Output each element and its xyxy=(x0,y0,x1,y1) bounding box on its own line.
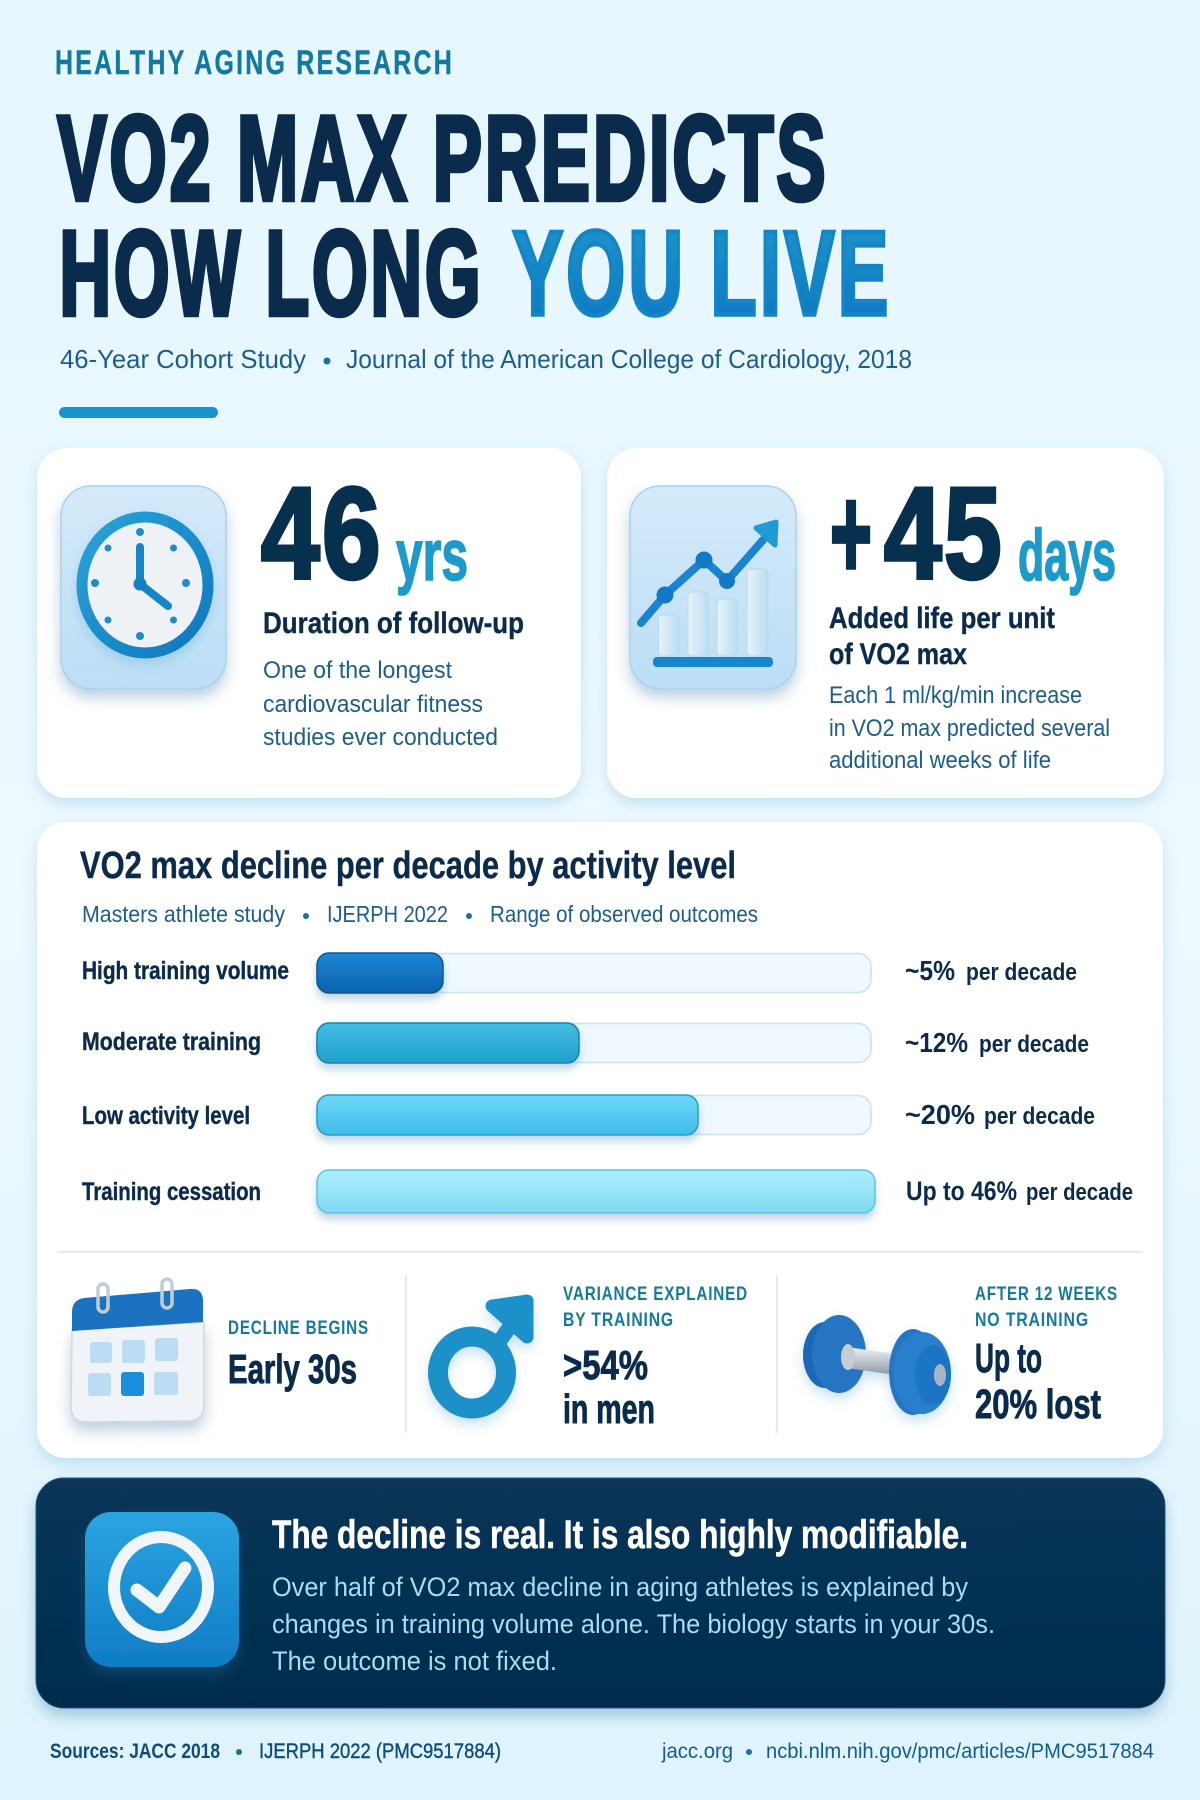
stat heading xyxy=(829,602,1055,671)
bar: low activity level xyxy=(82,1095,1095,1135)
chart subtitle xyxy=(82,901,758,927)
fact: after 12 weeks: AFTER 12 WEEKS xyxy=(975,1284,1118,1305)
bar: moderate training: Moderate training xyxy=(82,1028,261,1056)
fact: after 12 weeks: NO TRAINING xyxy=(975,1310,1089,1331)
bar: training cessation: Training cessation xyxy=(82,1178,261,1206)
bar: high training volume: ~5% xyxy=(905,955,955,986)
chart subtitle: IJERPH 2022 xyxy=(327,901,448,927)
stat description: One of the longest xyxy=(263,657,452,684)
bar: low activity level: per decade xyxy=(984,1103,1095,1130)
stat value: +45 days: days xyxy=(1018,516,1116,596)
icon: check mark xyxy=(85,1512,239,1667)
footer: links: jacc.org xyxy=(661,1740,733,1763)
stat value: 46 yrs: yrs xyxy=(396,516,468,596)
title: YOU LIVE xyxy=(512,206,892,340)
stat description: in VO2 max predicted several xyxy=(829,715,1110,742)
subtitle xyxy=(60,344,912,374)
bar: low activity level: Low activity level xyxy=(82,1102,250,1130)
callout body xyxy=(272,1572,995,1676)
fact: variance explained xyxy=(438,1284,748,1432)
fact: decline begins: Early 30s xyxy=(228,1346,357,1392)
stat value: +45 days: 45 xyxy=(884,460,1004,606)
stat description xyxy=(263,657,498,751)
header eyebrow: HEALTHY AGING RESEARCH xyxy=(55,44,454,82)
panel: +45 days stat xyxy=(607,448,1164,798)
callout: takeaway xyxy=(36,1478,1165,1708)
icon: calendar xyxy=(71,1279,204,1422)
callout body: The outcome is not fixed. xyxy=(272,1646,557,1676)
icon: dumbbell xyxy=(803,1315,951,1415)
bar: moderate training xyxy=(82,1023,1089,1063)
stat description: cardiovascular fitness xyxy=(263,691,483,718)
chart subtitle: Range of observed outcomes xyxy=(490,901,758,927)
fact: after 12 weeks xyxy=(803,1284,1118,1427)
bar chart xyxy=(82,953,1133,1213)
bar: high training volume: High training volume xyxy=(82,957,289,985)
stat description: studies ever conducted xyxy=(263,724,498,751)
bar: training cessation: per decade xyxy=(1026,1179,1133,1206)
bar: moderate training: per decade xyxy=(979,1031,1089,1058)
stat description xyxy=(829,682,1110,774)
stat heading: Added life per unit xyxy=(829,602,1055,635)
callout body: Over half of VO2 max decline in aging athletes is explained by xyxy=(272,1572,968,1602)
footer: sources: Sources: JACC 2018 xyxy=(50,1740,220,1763)
bar: high training volume: per decade xyxy=(966,959,1077,986)
bar: training cessation xyxy=(82,1170,1133,1213)
fact: variance explained: VARIANCE EXPLAINED xyxy=(563,1284,748,1305)
bar: high training volume xyxy=(82,953,1077,993)
bar: low activity level: ~20% xyxy=(905,1099,975,1130)
footer: sources xyxy=(50,1740,501,1763)
chart subtitle: Masters athlete study xyxy=(82,901,285,927)
stat value: +45 days xyxy=(830,460,1116,606)
fact: after 12 weeks: 20% lost xyxy=(975,1381,1101,1427)
bar: moderate training: ~12% xyxy=(905,1027,968,1058)
fact: variance explained: in men xyxy=(563,1386,655,1432)
callout headline: The decline is real. It is also highly modifiable. xyxy=(272,1513,968,1557)
panel: 46 years stat xyxy=(37,448,581,798)
stat heading: Duration of follow-up xyxy=(263,607,524,640)
icon: clock xyxy=(61,486,226,689)
footer: links: ncbi.nlm.nih.gov/pmc/articles/PMC9517884 xyxy=(766,1740,1154,1763)
subtitle: 46-Year Cohort Study xyxy=(60,344,306,374)
stat description: additional weeks of life xyxy=(829,747,1051,774)
stat value: 46 yrs: 46 xyxy=(261,460,383,606)
stat heading: of VO2 max xyxy=(829,638,967,671)
icon: male symbol xyxy=(438,1301,527,1408)
bar: training cessation: Up to 46% xyxy=(906,1176,1017,1206)
fact: variance explained: BY TRAINING xyxy=(563,1310,674,1331)
callout body: changes in training volume alone. The biology starts in your 30s. xyxy=(272,1609,995,1639)
footer: sources: IJERPH 2022 (PMC9517884) xyxy=(259,1740,501,1763)
chart heading: VO2 max decline per decade by activity level xyxy=(80,845,736,887)
panel: decline by activity level xyxy=(37,822,1163,1458)
stat value: +45 days: + xyxy=(830,460,872,606)
fact: after 12 weeks: Up to xyxy=(975,1335,1042,1381)
subtitle: Journal of the American College of Cardiology, 2018 xyxy=(346,344,912,374)
stat description: Each 1 ml/kg/min increase xyxy=(829,682,1082,709)
title xyxy=(58,92,892,340)
title: HOW LONG xyxy=(60,206,484,340)
fact: decline begins: DECLINE BEGINS xyxy=(228,1318,369,1339)
icon: rising chart xyxy=(630,486,796,689)
fact: variance explained: >54% xyxy=(563,1342,648,1388)
fact: decline begins xyxy=(71,1279,369,1422)
